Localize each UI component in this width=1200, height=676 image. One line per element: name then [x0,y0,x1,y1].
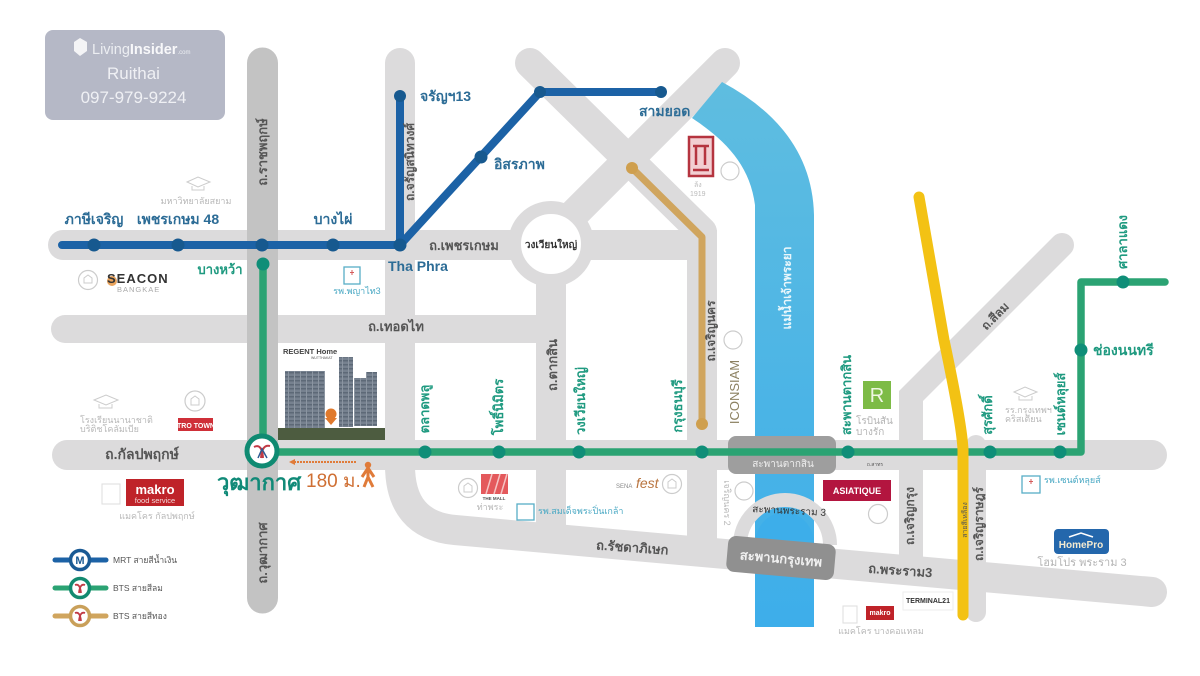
road labels: ถ.เจริญราษฎร์ [972,486,986,561]
poi: Metro Town [177,391,215,431]
station labels: blue line: จรัญฯ13 [420,88,471,105]
road labels: ถ.สาทร [867,462,883,468]
poi: The Mall Tha Phra: ท่าพระ [477,502,503,512]
road labels: ถ.พระราม3 [868,561,933,580]
road labels: ถ.วุฒากาศ [255,522,271,584]
station labels: blue line [65,88,690,274]
road labels: ถ.ตากสิน [545,339,560,391]
station labels: blue line: บางไผ่ [314,210,352,227]
poi: Phyathai 3 hospital: รพ.พญาไท3 [333,286,381,296]
river: Chao Phraya [692,82,814,627]
poi: Robinson Bangrak: R [870,385,884,407]
project: Regent Home Wutthakat: REGENT Home [283,347,337,356]
poi: Asiatique [823,480,891,524]
poi: The Mall Tha Phra [458,474,508,512]
road labels [105,118,1012,584]
poi: Robinson Bangrak [856,381,893,438]
road labels: ถ.จรัญสนิทวงศ์ [403,123,417,201]
station labels: blue line: สามยอด [639,103,690,119]
poi: Sena Fest [616,474,682,494]
poi: Sena Fest: SENA [616,484,632,490]
poi: Robinson Bangrak: บางรัก [856,427,884,438]
road labels: ถ.ราชพฤกษ์ [255,118,270,186]
poi: HomePro Rama 3: โฮมโปร พระราม 3 [1037,555,1127,569]
legend: MRT blue line [55,550,177,570]
station labels: green line: วงเวียนใหญ่ [572,367,589,435]
BTS gold line [626,162,708,430]
project: Regent Home Wutthakat: WUTTHAKAT [311,356,333,360]
poi: Soi Charoen Nakhon: เจริญนคร 2 [722,480,732,526]
station labels: green line: สุรศักดิ์ [977,394,996,435]
poi: Makro Kalapapruek: แมคโคร กัลปพฤกษ์ [119,510,195,521]
station labels: green line: ช่องนนทรี [1093,342,1154,358]
poi: Seacon Bangkae [78,270,169,294]
legend: MRT blue line: MRT สายสีน้ำเงิน [113,554,177,565]
project: Regent Home Wutthakat [278,347,385,440]
poi: Makro Kalapapruek: makro [135,482,175,497]
interchange ring: Rama 3 bridge [740,500,830,545]
bridge: Krung Thep: สะพานกรุงเทพ [739,547,823,571]
poi: Somdej Phra Pinklao hospital [517,504,623,520]
poi: Bangkok Christian College [1005,387,1052,424]
poi: Lhong 1919: 1919 [690,191,706,198]
road labels: ถ.เจริญกรุง [903,487,918,545]
poi: Iconsiam: ICONSIAM [727,360,742,424]
road labels: ถ.สีลม [978,299,1012,333]
poi: school [80,395,153,434]
poi: HomePro Rama 3: HomePro [1059,540,1103,551]
logo badge: LivingInsider: 097-979-9224 [81,88,186,107]
station labels: green line [197,215,1154,436]
poi: Saint Louis hospital: รพ.เซนต์หลุยส์ [1044,474,1101,486]
poi: Terminal 21 Rama 3: TERMINAL21 [906,598,950,605]
road labels: ถ.กัลปพฤกษ์ [105,446,179,462]
station labels: green line: เซนต์หลุยส์ [1053,373,1069,435]
bridge: Taksin: สะพานตากสิน [752,459,814,470]
station labels: green line: กรุงธนบุรี [670,379,686,433]
poi: Metro Town: TRO TOWN [177,423,215,430]
poi: school: โรงเรียนนานาชาติ [80,415,153,425]
MRT blue line [62,86,667,252]
station labels: green line: บางหว้า [197,262,243,277]
poi: Saint Louis hospital [1022,474,1101,493]
poi: Makro Kalapapruek [102,479,195,521]
icon: Wutthakat interchange station [247,436,277,466]
road labels: ถ.รัชดาภิเษก [596,538,669,558]
road labels: ถ.เทอดไท [368,318,424,334]
station labels: green line: โพธิ์นิมิตร [488,379,506,436]
poi: Somdej Phra Pinklao hospital: รพ.สมเด็จพระปิ่นเกล้า [538,504,623,516]
logo badge: LivingInsider: LivingInsider.com [92,42,190,58]
poi: HomePro Rama 3 [1037,529,1127,569]
poi: Robinson Bangrak: โรบินสัน [856,414,893,427]
station labels: blue line: อิสรภาพ [493,156,545,172]
BTS yellow line [919,197,963,615]
BTS green line [256,258,1165,458]
poi: Seacon Bangkae: BANGKAE [117,285,160,294]
bridge: Krung Thep [726,535,836,581]
poi: Terminal 21 Rama 3 [903,592,953,610]
poi: The Mall Tha Phra: THE MALL [483,496,506,501]
poi: Asiatique: ASIATIQUE [833,486,881,496]
poi: Makro Bang Kho Laem: makro [869,610,891,617]
label: Rama 3 bridge: สะพานพระราม 3 [752,504,827,519]
poi: Makro Bang Kho Laem [838,606,924,636]
legend: BTS green line: BTS สายสีลม [113,583,163,593]
legend: BTS gold line: BTS สายสีทอง [113,611,167,621]
poi: Soi Charoen Nakhon [722,480,753,526]
river label: แม่น้ำเจ้าพระยา [777,246,794,330]
legend: MRT blue line: M [75,555,85,567]
poi: Siam University: มหาวิทยาลัยสยาม [161,196,231,206]
poi: Lhong 1919 [689,137,739,198]
road labels: ถ.เจริญนคร [704,300,718,362]
poi: school: บริติชโคลัมเบีย [80,424,139,434]
station labels: green line: ศาลาแดง [1115,215,1130,269]
road labels: สายสีเหลือง [961,502,969,538]
poi: Makro Bang Kho Laem: แมคโคร บางคอแหลม [838,626,924,636]
label: Wutthakat: วุฒากาศ [217,470,302,497]
distance callout: 180 m walk: 180 ม. [306,471,361,492]
poi: Makro Kalapapruek: food service [135,496,175,505]
bridge: Taksin [728,436,836,474]
station labels: green line: ตลาดพลู [417,385,433,433]
station labels: blue line: ภาษีเจริญ [65,211,123,228]
road labels: ถ.เพชรเกษม [429,238,499,253]
poi: Iconsiam [724,331,742,424]
poi: Bangkok Christian College: คริสเตียน [1005,414,1042,424]
road network [63,63,1152,612]
logo badge: LivingInsider: Ruithai [107,64,160,83]
distance callout: 180 m walk [289,459,374,492]
logo badge: LivingInsider [45,30,225,120]
poi: Siam University [161,177,231,206]
station labels: blue line: Tha Phra [388,258,448,274]
road: Ratchaphruek [247,63,278,598]
poi: Lhong 1919: ล้ง [694,181,702,189]
poi: Phyathai 3 hospital [333,267,381,296]
poi: Sena Fest: fest [636,475,660,491]
legend [55,550,177,626]
station labels: blue line: เพชรเกษม 48 [137,211,219,227]
poi: Bangkok Christian College: รร.กรุงเทพฯ [1005,405,1052,416]
road labels: วงเวียนใหญ่ [525,238,578,251]
poi: Seacon Bangkae: SEACON [107,271,169,286]
station labels: green line: สะพานตากสิน [839,355,854,435]
river pool inside ring [755,512,814,540]
